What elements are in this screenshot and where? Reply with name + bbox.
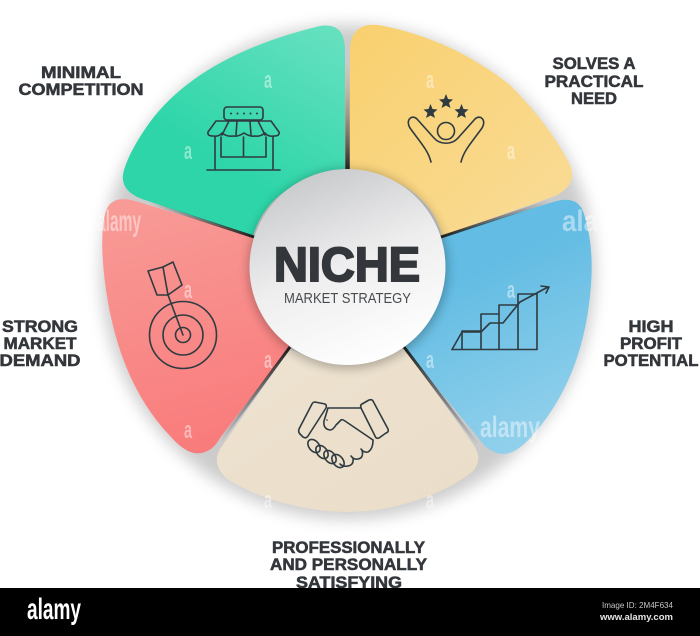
footer logo: alamy — [27, 593, 81, 626]
label: high profit potential: POTENTIAL — [604, 352, 698, 370]
label: solves a practical need: SOLVES A — [552, 55, 636, 73]
label: high profit potential: PROFIT — [620, 335, 682, 353]
label: professionally and personally satisfying: PROFESSIONALLY — [272, 539, 425, 557]
label: strong market demand: DEMAND — [0, 352, 81, 370]
watermarks: a — [264, 347, 272, 374]
image id: Image ID: 2M4F634 — [602, 600, 673, 610]
watermarks: ala — [562, 205, 598, 238]
panel: practical need segment (yellow) — [350, 25, 572, 236]
website: www.alamy.com — [599, 612, 673, 622]
watermarks: a — [184, 417, 192, 444]
title: NICHE: NICHE — [274, 239, 420, 292]
label: high profit potential: HIGH — [628, 318, 674, 336]
label: high profit potential — [604, 318, 698, 370]
watermarks: a — [426, 487, 434, 514]
watermarks: a — [426, 347, 434, 374]
segment divider shadows — [150, 60, 550, 445]
label: solves a practical need: NEED — [571, 90, 617, 108]
wheel drop shadow — [101, 25, 595, 519]
label: strong market demand: MARKET — [4, 335, 76, 353]
label: minimal competition: COMPETITION — [18, 81, 144, 99]
label: minimal competition: MINIMAL — [41, 64, 121, 82]
watermarks: a — [264, 487, 272, 514]
label: minimal competition — [18, 64, 144, 99]
watermarks: a — [184, 277, 192, 304]
panel: satisfying segment (beige) — [217, 348, 478, 512]
label: professionally and personally satisfying: AND PERSONALLY — [270, 556, 427, 574]
subtitle: market strategy: MARKET STRATEGY — [284, 291, 411, 307]
label: solves a practical need — [544, 55, 644, 108]
icon: handshake — [299, 400, 388, 470]
watermarks: alamy — [97, 205, 141, 238]
panel: market demand segment (red) — [102, 199, 290, 453]
label: professionally and personally satisfying — [270, 539, 427, 592]
icon: dart and target — [148, 262, 216, 368]
watermarks: a — [426, 67, 434, 94]
label: strong market demand: STRONG — [2, 318, 78, 336]
panel: profit segment (blue) — [404, 200, 592, 454]
watermarks: a — [184, 138, 192, 165]
icon: growth chart — [452, 286, 549, 350]
icon: storefront — [207, 107, 280, 170]
watermarks: a — [264, 67, 272, 94]
watermarks: a — [507, 138, 515, 165]
watermarks: alamy — [480, 411, 540, 444]
label: solves a practical need: PRACTICAL — [544, 73, 644, 91]
label: strong market demand — [0, 318, 81, 370]
footer bar — [0, 588, 700, 636]
watermarks — [97, 67, 598, 514]
icon: person with three stars — [408, 94, 484, 162]
center circle shadow — [248, 169, 448, 369]
panel: minimal competition segment (green) — [123, 25, 345, 236]
center circle — [250, 169, 446, 365]
watermarks: a — [507, 277, 515, 304]
label: professionally and personally satisfying: SATISFYING — [296, 574, 402, 592]
